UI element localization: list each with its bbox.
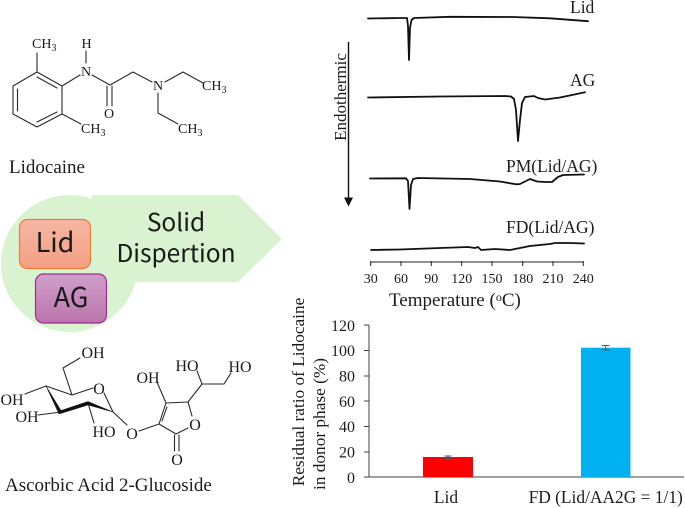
arrow text: Dispertion — [116, 235, 236, 270]
category labels: FD (Lid/AA2G = 1/1) — [529, 487, 683, 507]
category labels — [434, 487, 683, 507]
y tick labels: 120 — [331, 318, 355, 335]
AG box — [36, 274, 106, 323]
lidocaine structure: 3 — [51, 43, 56, 54]
ascorbic acid 2-glucoside structure: OH — [136, 370, 160, 387]
green arrow callout — [1, 195, 282, 332]
temperature axis: 210 — [542, 272, 564, 287]
curve labels: FD(Lid/AG) — [506, 217, 595, 237]
ascorbic acid 2-glucoside structure: O — [126, 426, 138, 443]
temperature axis title: C) — [502, 290, 521, 311]
ascorbic acid 2-glucoside structure: HO — [228, 359, 252, 376]
bar: FD — [581, 348, 630, 477]
y tick labels — [331, 318, 355, 487]
arrow: endothermic direction — [344, 42, 353, 206]
curve: PM — [370, 174, 584, 209]
endothermic label: Endothermic — [331, 53, 350, 141]
error bars — [444, 346, 610, 458]
temperature axis: 60 — [394, 272, 408, 287]
lidocaine label: Lidocaine — [9, 157, 85, 178]
curve: Lid — [368, 17, 588, 60]
lidocaine structure: H — [82, 37, 92, 52]
AG box: AG — [54, 276, 88, 315]
ascorbic acid 2-glucoside structure — [0, 345, 252, 469]
lidocaine structure: O — [104, 107, 114, 122]
ascorbic acid 2-glucoside structure: OH — [15, 409, 39, 426]
lidocaine structure: 3 — [197, 128, 202, 139]
y tick labels: 20 — [339, 444, 355, 462]
temperature axis title: o — [496, 290, 502, 304]
lidocaine structure: 3 — [221, 85, 226, 96]
temperature axis: 120 — [451, 272, 472, 287]
lidocaine structure: CH — [32, 37, 51, 52]
temperature axis: 240 — [573, 272, 594, 287]
y tick labels: 80 — [339, 368, 355, 386]
temperature axis — [364, 261, 594, 287]
lidocaine structure — [13, 37, 226, 139]
ascorbic acid 2-glucoside structure: O — [93, 381, 105, 398]
temperature axis: 150 — [482, 272, 502, 287]
y tick labels: 40 — [339, 419, 355, 436]
temperature axis: 90 — [424, 272, 438, 287]
ascorbic acid 2-glucoside structure: O — [189, 417, 201, 434]
curve labels: AG — [570, 70, 596, 90]
temperature axis title: Temperature ( — [389, 290, 496, 311]
ascorbic acid 2-glucoside structure: HO — [175, 358, 199, 375]
Lid box: Lid — [36, 221, 74, 260]
temperature axis: 180 — [512, 272, 533, 287]
lidocaine structure: CH — [81, 122, 100, 137]
curve: FD — [371, 243, 584, 250]
Lid box — [20, 220, 90, 268]
arrow text — [116, 204, 236, 270]
curve labels — [506, 0, 598, 237]
bar chart: residual ratio — [289, 297, 684, 507]
bar: Lid — [423, 457, 473, 477]
ascorbic acid 2-glucoside structure: O — [171, 452, 183, 469]
lidocaine structure: CH — [202, 79, 221, 94]
y axis title: in donor phase (%) — [310, 358, 329, 490]
y axis title: Residual ratio of Lidocaine — [289, 297, 308, 486]
lidocaine structure: 3 — [100, 128, 105, 139]
category labels: Lid — [434, 487, 458, 507]
y axis title — [289, 297, 329, 490]
solid dispersion graphic — [1, 195, 282, 332]
y tick labels: 0 — [347, 470, 355, 487]
y tick labels: 100 — [331, 343, 355, 360]
lidocaine structure: N — [153, 79, 163, 94]
ascorbic acid 2-glucoside structure: OH — [0, 392, 24, 409]
lidocaine structure: CH — [178, 122, 197, 137]
axes — [364, 325, 684, 477]
lidocaine structure: N — [81, 65, 91, 80]
y tick labels: 60 — [339, 394, 355, 411]
ascorbic acid 2-glucoside structure: HO — [92, 424, 116, 441]
DSC thermogram chart — [331, 0, 598, 311]
temperature axis: 30 — [364, 272, 378, 287]
arrow text: Solid — [147, 204, 205, 239]
curve: AG — [368, 92, 585, 141]
ascorbic acid 2-glucoside label: Ascorbic Acid 2-Glucoside — [5, 475, 212, 496]
ascorbic acid 2-glucoside structure: OH — [81, 345, 105, 362]
curve labels: PM(Lid/AG) — [506, 156, 598, 176]
